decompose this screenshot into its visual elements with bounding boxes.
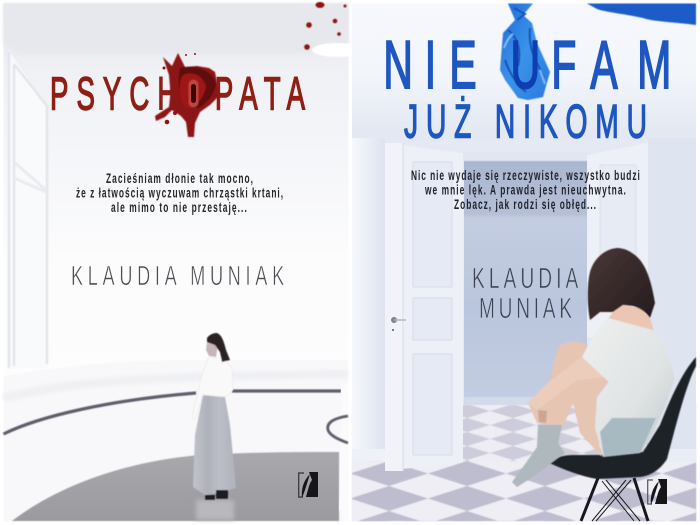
icon: blue fabric column — [500, 4, 550, 100]
title: NIE UFAM: E — [449, 26, 477, 103]
arm — [528, 357, 607, 410]
blurb text right — [411, 169, 640, 213]
right pillar — [328, 382, 348, 521]
ceiling lamp — [312, 43, 364, 57]
letter O inside the splatter — [188, 80, 198, 108]
title: NIE UFAM: N — [383, 26, 413, 103]
author: Klaudia Muniak right: MUNIAK — [479, 293, 573, 325]
blurb text right: Nic nie wydaje się rzeczywiste, wszystko budzi — [411, 169, 640, 184]
shoulder — [608, 305, 654, 332]
hair — [588, 248, 655, 320]
blurb text right: we mnie lęk. A prawda jest nieuchwytna. — [424, 184, 626, 198]
title: NIE UFAM: M — [637, 26, 671, 103]
shoes — [205, 490, 228, 500]
author: Klaudia Muniak right: KLAUDIA — [472, 263, 579, 295]
blurb text left: że z łatwością wyczuwam chrząstki krtani, — [76, 187, 283, 201]
blurb text left: Zacieśniam dłonie tak mocno, — [106, 172, 253, 187]
icon: blood drops on ceiling — [304, 2, 346, 50]
hair — [207, 333, 230, 362]
icon: blue fabric corner — [587, 4, 696, 25]
right door — [587, 143, 648, 338]
reflection — [196, 500, 234, 520]
shorts showing through — [600, 418, 656, 457]
door handle — [391, 317, 397, 323]
chair seat and back — [547, 357, 696, 479]
title: NIE UFAM: A — [590, 26, 618, 103]
shirt — [582, 318, 675, 457]
chair legs — [581, 478, 648, 521]
handrail — [4, 391, 341, 434]
logo: publisher mark — [299, 472, 318, 498]
panel: left book cover Psychopata — [4, 2, 364, 521]
title: NIE UFAM: U — [511, 26, 540, 103]
blouse — [192, 357, 233, 420]
face — [206, 342, 218, 357]
leg and knee — [528, 342, 610, 457]
blurb text left — [76, 172, 283, 216]
window on left wall — [8, 50, 48, 368]
ceiling — [4, 4, 348, 54]
woman in long skirt — [192, 333, 236, 520]
title: NIE UFAM: F — [551, 26, 576, 103]
title: NIE UFAM: I — [425, 26, 436, 103]
doorway opening — [464, 160, 587, 404]
author: Klaudia Muniak right — [472, 263, 579, 325]
floor — [12, 452, 339, 521]
wall side parts — [352, 138, 385, 461]
girl on chair — [512, 248, 675, 487]
title: JUŻ NIKOMU: JUŻ NIKOMU — [404, 96, 647, 148]
skirt — [193, 395, 236, 495]
panel: right book cover Nie ufam już nikomu — [352, 4, 696, 521]
curved ledge wall — [4, 360, 348, 521]
icon: blood splatter — [155, 53, 219, 137]
blurb text left: ale mimo to nie przestaję... — [111, 201, 247, 216]
author: Klaudia Muniak left: KLAUDIA MUNIAK — [71, 260, 285, 291]
sock — [512, 425, 565, 487]
logo: publisher mark right — [648, 479, 667, 505]
fingers — [538, 410, 547, 423]
floor — [352, 404, 696, 521]
title: PSYCHOPATA: PSYCHOPATA — [50, 69, 306, 120]
left door — [385, 143, 463, 471]
blurb text right: Zobacz, jak rodzi się obłęd... — [454, 198, 596, 213]
door lintel — [458, 152, 592, 161]
